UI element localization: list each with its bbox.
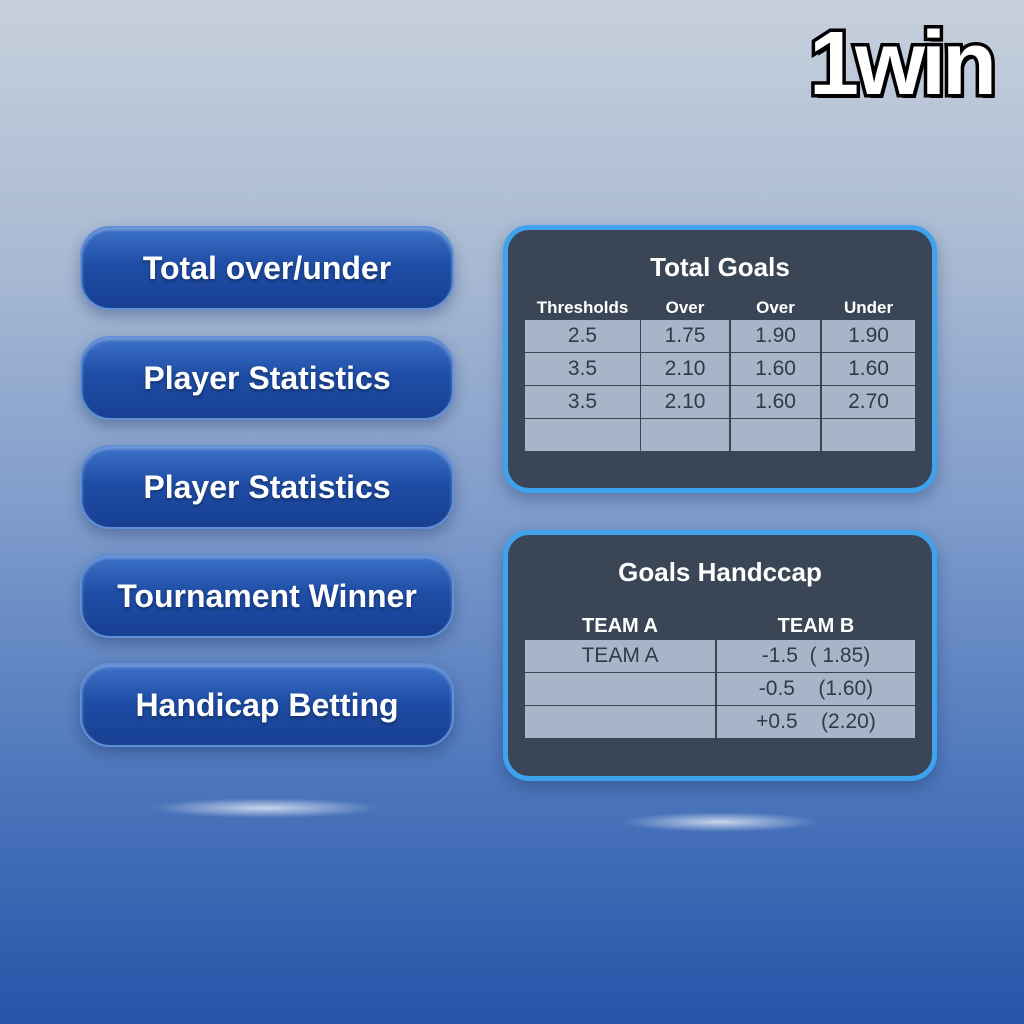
- button: Total over/under: [80, 226, 454, 310]
- table body: TEAM A: [581, 644, 659, 667]
- table headers: [536, 298, 893, 317]
- button: Player Statistics 2: Player Statistics: [143, 468, 391, 504]
- button: Player Statistics: [80, 336, 454, 420]
- table body: 1.90: [755, 324, 796, 347]
- table body: -1.5 ( 1.85): [762, 644, 870, 667]
- table body: 1.60: [755, 390, 796, 413]
- button: Handicap Betting: [80, 663, 454, 747]
- button: Tournament Winner: [80, 554, 454, 638]
- table body: 1.60: [755, 357, 796, 380]
- table body: 3.5: [568, 390, 597, 413]
- decorative glow under buttons: [150, 798, 380, 818]
- button: Tournament Winner: Tournament Winner: [117, 578, 417, 614]
- button: Player Statistics 2: [80, 445, 454, 529]
- table body: 3.5: [568, 357, 597, 380]
- logo: 1win: 1win: [809, 14, 993, 114]
- table body: -0.5 (1.60): [759, 677, 873, 700]
- table body: 2.5: [568, 324, 597, 347]
- table headers: Thresholds: [537, 298, 628, 317]
- table headers: Under: [844, 298, 893, 317]
- table body: +0.5 (2.20): [756, 710, 876, 733]
- table body: [525, 640, 915, 738]
- table headers: Over: [756, 298, 795, 317]
- table body: 2.70: [848, 390, 889, 413]
- heading: Goals Handccap: [618, 557, 822, 587]
- table headers: TEAM A: [582, 615, 658, 637]
- table body: 2.10: [665, 390, 705, 413]
- button: Total over/under: Total over/under: [143, 250, 391, 286]
- table headers: Over: [666, 298, 704, 317]
- heading: Total Goals: [650, 252, 790, 282]
- panel: Total Goals: [503, 225, 937, 493]
- table body: 2.10: [665, 357, 705, 380]
- table headers: TEAM B: [778, 615, 854, 637]
- table body: 1.60: [848, 357, 889, 380]
- table body: 1.75: [665, 324, 705, 347]
- panel: Goals Handicap: [503, 530, 937, 781]
- button: Player Statistics: Player Statistics: [143, 360, 391, 396]
- button: Handicap Betting: Handicap Betting: [135, 686, 399, 722]
- table body: 1.90: [848, 324, 889, 347]
- table headers: [582, 615, 854, 637]
- table body: [525, 320, 915, 451]
- decorative glow under panels: [620, 812, 820, 832]
